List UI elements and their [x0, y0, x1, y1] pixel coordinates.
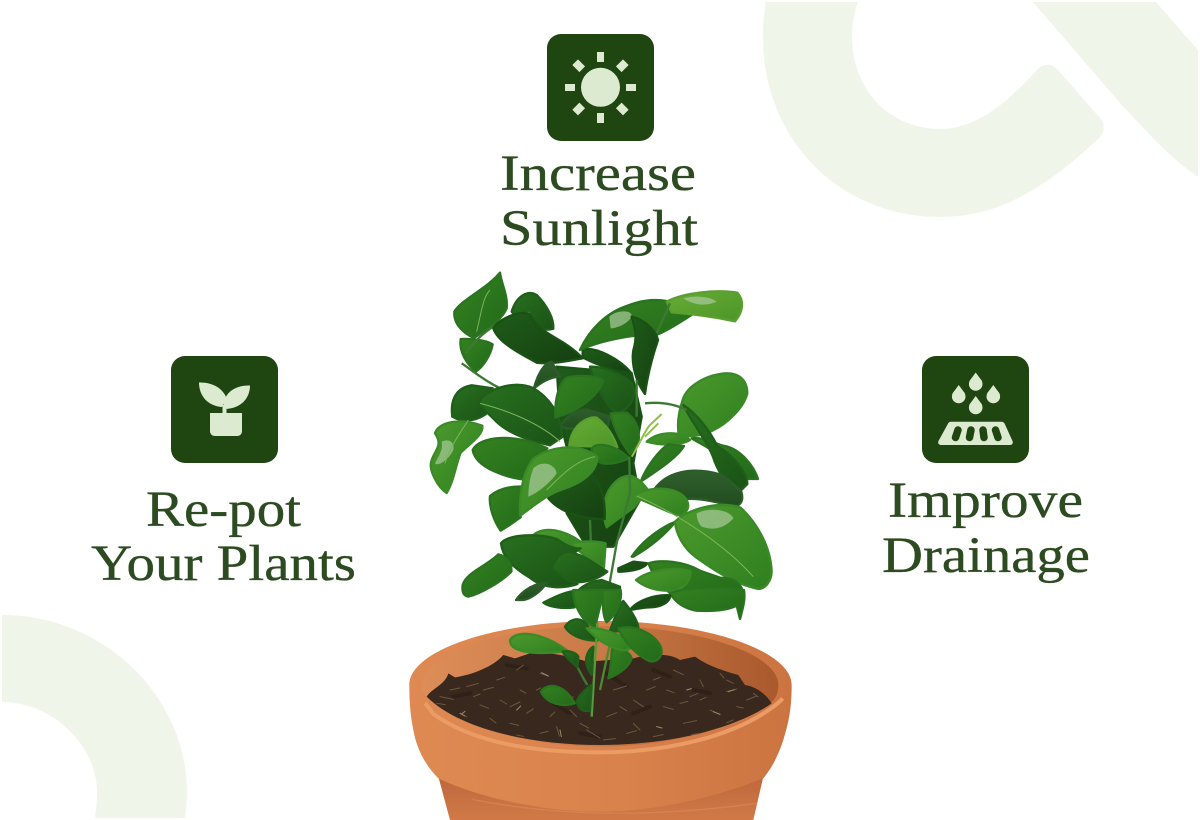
heading: Increase Sunlight: Sunlight: [500, 201, 698, 257]
terracotta pot with soil: [409, 621, 792, 820]
illustration: potted citrus plant: [409, 273, 792, 820]
heading: Re-pot Your Plants: Your Plants: [91, 536, 356, 592]
heading: Re-pot Your Plants: Re-pot: [146, 482, 301, 538]
lower foliage and stems: [510, 588, 744, 717]
background shape: top-right diagonal band: [1033, 2, 1198, 177]
heading: Improve Drainage: Improve: [888, 473, 1083, 529]
heading: Increase Sunlight: [500, 146, 698, 257]
upper foliage: [431, 273, 772, 600]
icon: sun: [547, 34, 654, 141]
icon: drainage grate with water drops: [922, 356, 1029, 463]
heading: Improve Drainage: [882, 473, 1090, 584]
heading: Re-pot Your Plants: [91, 482, 356, 592]
background shape: top-right arc: [763, 2, 1104, 217]
heading: Improve Drainage: Drainage: [882, 528, 1090, 584]
heading: Increase Sunlight: Increase: [500, 146, 696, 202]
background shape: bottom-left arc: [2, 615, 187, 818]
icon: potted seedling: [171, 356, 278, 463]
